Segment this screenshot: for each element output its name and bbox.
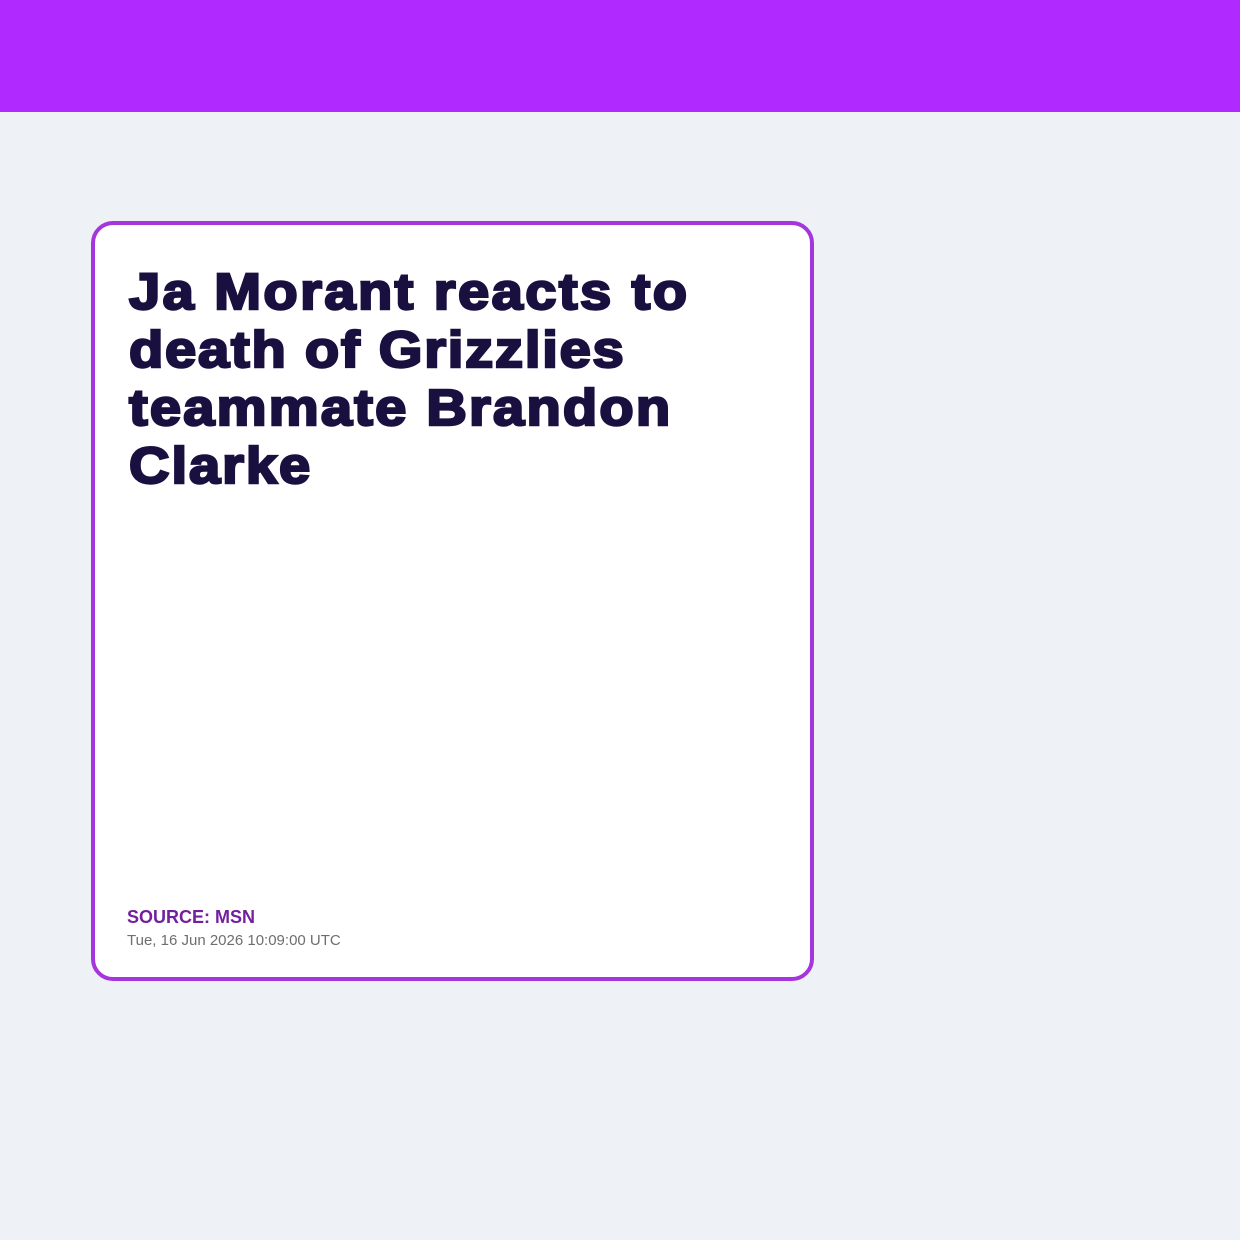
title: Ja Morant reacts to [128, 263, 689, 320]
title [128, 263, 689, 494]
publication date: Tue, 16 Jun 2026 10:09:00 UTC [127, 932, 341, 949]
panel: news card [91, 221, 814, 981]
source label: SOURCE: MSN [127, 907, 255, 927]
title: death of Grizzlies [128, 321, 625, 378]
top banner [0, 0, 1240, 112]
title: teammate Brandon [128, 379, 672, 436]
title: Clarke [128, 437, 312, 494]
